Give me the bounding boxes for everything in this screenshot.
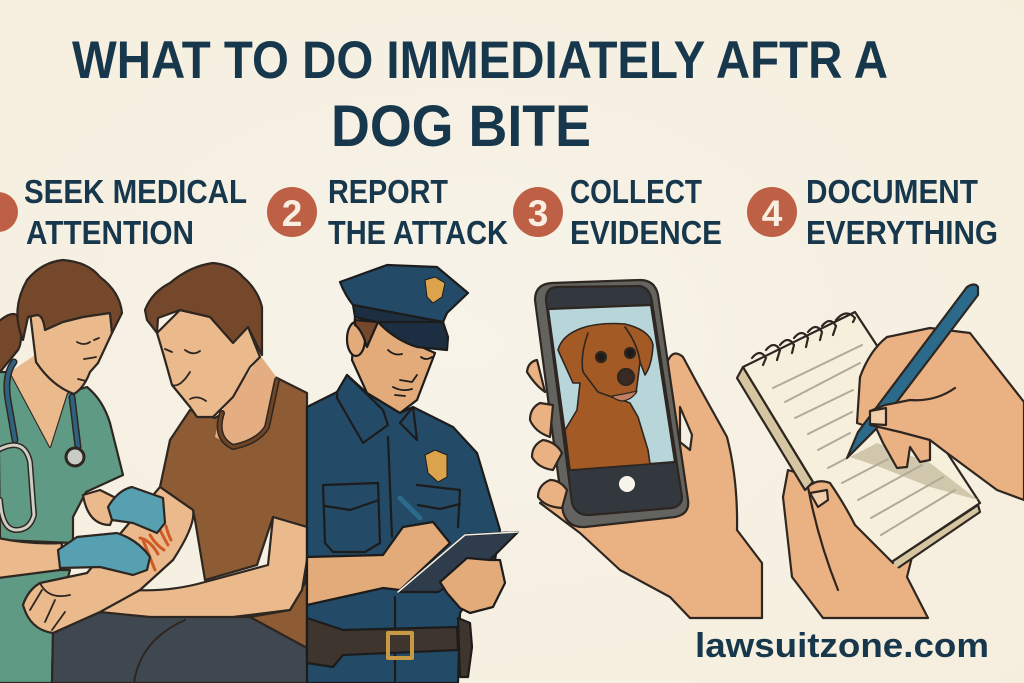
lower thumb over notepad (808, 481, 907, 600)
illustration: doctor treating patient (0, 260, 307, 683)
page shadow (850, 443, 978, 500)
patient far leg fold (134, 620, 185, 683)
lower thumb outline (808, 481, 893, 590)
step 3 heading: EVIDENCE (570, 214, 722, 251)
right pocket (417, 485, 460, 527)
holster (458, 618, 472, 677)
pen (847, 284, 978, 458)
hand (540, 354, 762, 618)
cap badge (425, 277, 445, 303)
cap crown (340, 265, 468, 322)
spiral binding (752, 313, 855, 365)
patient neck (215, 355, 277, 447)
nurse arms (0, 490, 120, 578)
upper glove (108, 487, 165, 533)
phone case (535, 280, 688, 527)
phone face (546, 286, 682, 515)
dog tongue (612, 391, 637, 401)
step 3 heading: COLLECT (570, 173, 702, 210)
step 1 heading (0, 173, 247, 251)
officer arm and writing hand (307, 522, 450, 605)
nurse eyes and mouth (77, 338, 99, 381)
lower hand (783, 470, 928, 618)
title: WHAT TO DO IMMEDIATELY AFTR A (72, 31, 888, 90)
shirt collar (220, 380, 277, 447)
belt buckle (388, 633, 412, 658)
thumb (870, 388, 962, 440)
step 2 heading: 2 (282, 193, 302, 234)
finger lines (30, 583, 70, 630)
dog ear lines (582, 327, 640, 400)
illustration: hands writing in a notepad (737, 284, 1024, 618)
officer hair (355, 320, 378, 347)
wound (140, 526, 171, 570)
left collar (337, 375, 388, 443)
patient shirt (160, 377, 307, 648)
officer features (388, 350, 432, 396)
patient forearm and hand (23, 487, 193, 633)
upper hand (857, 328, 1024, 500)
chest badge (425, 450, 447, 482)
notepad page (743, 312, 980, 563)
phone screen (548, 305, 675, 470)
placket (388, 437, 395, 683)
nurse scrubs lower (0, 570, 70, 683)
step 3 heading (513, 173, 722, 251)
ear (347, 322, 365, 356)
title: DOG BITE (331, 94, 591, 159)
step 4 heading: 4 (762, 193, 783, 234)
gap between thumb and palm (680, 407, 692, 450)
step 4 heading: DOCUMENT (806, 173, 978, 210)
title (72, 31, 888, 159)
dog nose (618, 369, 634, 385)
notepad (398, 532, 518, 592)
dog eyes (596, 352, 606, 362)
step 1 heading: SEEK MEDICAL (24, 173, 247, 210)
notepad pages edge (737, 367, 980, 570)
nurse neck (10, 355, 85, 447)
step 4 heading (747, 173, 998, 251)
patient arm across lap (100, 517, 307, 617)
patient features (165, 349, 206, 401)
fingers (527, 360, 567, 508)
pen (400, 498, 420, 518)
thumb nail (870, 408, 886, 425)
illustration: police officer (307, 265, 518, 683)
nurse hair (17, 260, 122, 340)
nurse scrubs (0, 372, 123, 543)
step 2 heading: REPORT (328, 173, 448, 210)
step 2 heading: THE ATTACK (328, 214, 508, 251)
right collar (400, 407, 417, 440)
holding hand (440, 558, 505, 613)
step 3 heading: 3 (528, 193, 548, 234)
patient face (157, 310, 260, 417)
thumb outline (870, 388, 955, 440)
nurse face (30, 310, 112, 394)
belt (307, 618, 458, 667)
patient legs (52, 612, 307, 683)
lower thumb nail (810, 490, 828, 507)
dog (558, 324, 653, 470)
illustration: hand holding phone with dog photo (527, 280, 762, 618)
patient hair (145, 263, 262, 355)
nurse ponytail (0, 314, 21, 372)
step 1 heading: ATTENTION (26, 214, 194, 251)
notepad lines (773, 345, 955, 535)
notepad edge (398, 532, 518, 592)
website url: lawsuitzone.com (695, 627, 989, 665)
left pocket (323, 483, 380, 552)
lower glove (58, 533, 150, 575)
step 4 heading: EVERYTHING (806, 214, 998, 251)
uniform (307, 375, 500, 683)
neck and face (352, 317, 435, 413)
visor (378, 322, 448, 350)
capture button (619, 476, 635, 492)
stethoscope (0, 362, 84, 530)
step 2 heading (267, 173, 508, 251)
cap band (353, 305, 446, 337)
